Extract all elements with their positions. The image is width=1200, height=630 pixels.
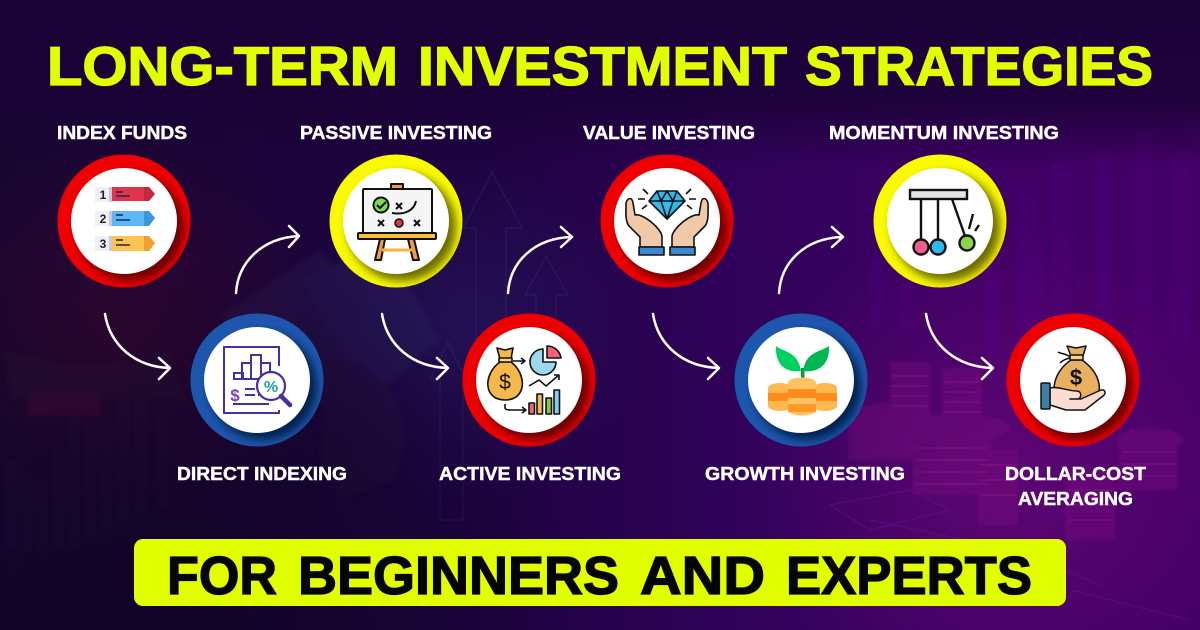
step: passive investing [300, 123, 492, 288]
subtitle banner: AND [640, 546, 765, 606]
arrow: index funds to direct indexing [105, 314, 170, 379]
ring and icon: ranked list: 3 [100, 237, 107, 251]
label: dollar-cost averaging [1005, 464, 1146, 509]
ring and icon: money bag and charts [462, 314, 596, 446]
ring and icon: ranked list [58, 154, 190, 288]
step: momentum investing [829, 123, 1059, 288]
ring and icon: report with magnifier [190, 314, 324, 446]
ring and icon: diamond in hands [600, 154, 734, 288]
arrow: direct indexing to passive investing [236, 226, 299, 293]
label: dollar-cost averaging: AVERAGING [1018, 489, 1133, 509]
label: active investing: ACTIVE INVESTING [439, 464, 621, 484]
subtitle banner: BEGINNERS [298, 546, 619, 606]
step: value investing [583, 123, 755, 288]
ring and icon: sprout on coins [734, 314, 868, 446]
title: LONG-TERM [47, 35, 398, 97]
subtitle banner [134, 539, 1066, 606]
ring and icon: money bag on hand [1006, 314, 1140, 446]
ring and icon: money bag and charts: $ [499, 371, 511, 394]
ring and icon: ranked list: 2 [100, 212, 107, 226]
title: STRATEGIES [805, 35, 1153, 97]
step: active investing [439, 314, 621, 484]
arrow: momentum investing to dollar-cost averaging [926, 314, 993, 379]
subtitle banner: EXPERTS [786, 546, 1032, 606]
label: value investing: VALUE INVESTING [583, 123, 755, 143]
title [47, 35, 1153, 97]
ring and icon: ranked list: 1 [100, 188, 107, 202]
label: dollar-cost averaging: DOLLAR-COST [1005, 464, 1146, 484]
step: growth investing [705, 314, 905, 484]
ring and icon: report with magnifier: % [264, 379, 278, 396]
step: direct indexing [177, 314, 347, 484]
label: index funds: INDEX FUNDS [57, 123, 187, 143]
label: growth investing: GROWTH INVESTING [705, 464, 905, 484]
subtitle banner: FOR [167, 546, 277, 606]
step: dollar-cost averaging [1005, 314, 1146, 509]
step: index funds [57, 123, 190, 288]
ring and icon: money bag on hand: $ [1070, 365, 1082, 390]
ring and icon: report with magnifier: $ [230, 386, 240, 405]
arrow: value investing to growth investing [653, 314, 719, 379]
arrow: growth investing to momentum investing [779, 227, 843, 293]
ring and icon: strategy board [330, 154, 462, 288]
label: direct indexing: DIRECT INDEXING [177, 464, 347, 484]
title: INVESTMENT [418, 35, 787, 97]
label: passive investing: PASSIVE INVESTING [300, 123, 492, 143]
arrow: passive investing to active investing [382, 314, 448, 379]
label: momentum investing: MOMENTUM INVESTING [829, 123, 1059, 143]
arrow: active investing to value investing [508, 227, 572, 293]
ring and icon: newton's cradle [874, 154, 1006, 288]
